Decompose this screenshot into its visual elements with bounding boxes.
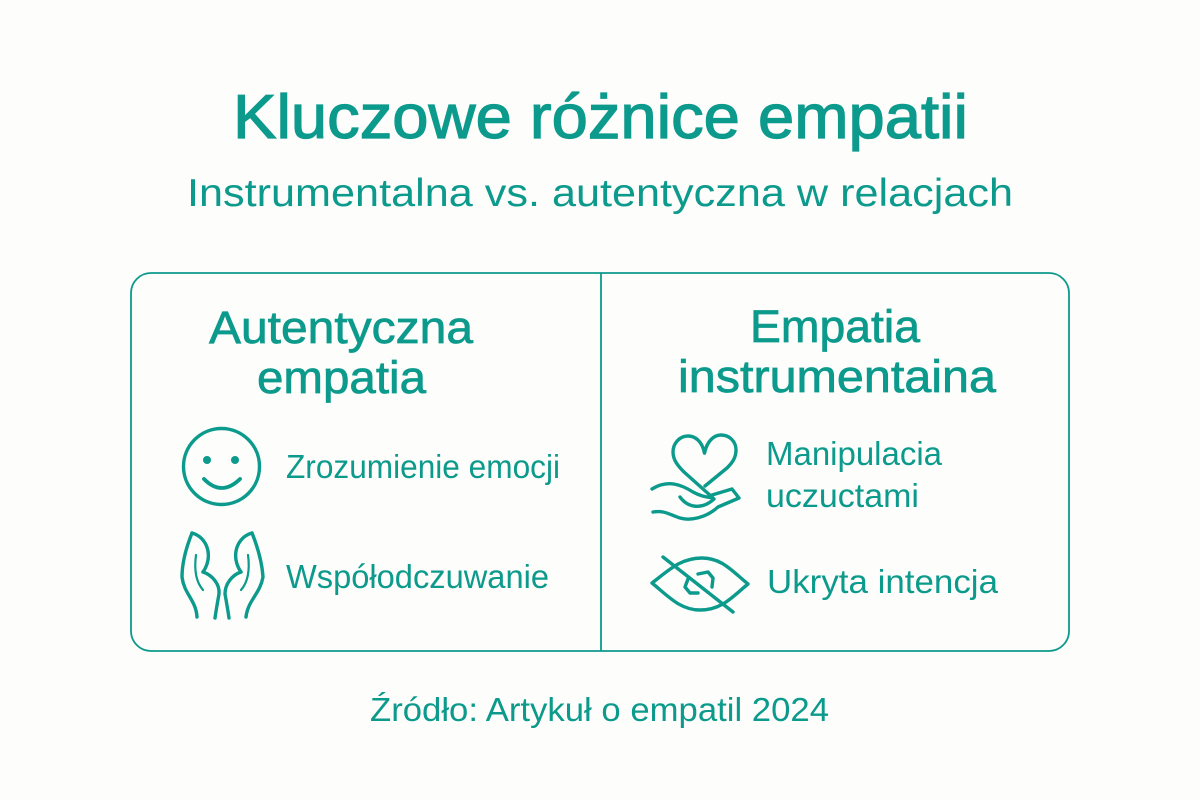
title: Kluczowe różnice empatii <box>233 83 968 152</box>
label: compassion: Współodczuwanie <box>286 558 549 595</box>
panel: instrumental empathy <box>652 301 999 612</box>
label: understanding emotions: Zrozumienie emocji <box>286 448 560 485</box>
heading: instrumental empathy <box>678 301 997 402</box>
source note: Źródło: Artykuł o empatil 2024 <box>370 691 829 728</box>
heading: instrumental empathy: Empatia <box>750 301 921 352</box>
icon: heart on hand <box>652 435 739 519</box>
icon: open hands <box>182 533 263 618</box>
icon: smiling face <box>184 428 260 504</box>
heading: authentic empathy <box>209 302 474 403</box>
label: manipulating feelings: uczuctami <box>766 477 919 514</box>
label: hidden intention: Ukryta intencja <box>767 563 999 600</box>
label: manipulating feelings <box>766 435 943 514</box>
heading: authentic empathy: Autentyczna <box>209 302 474 353</box>
comparison panel <box>131 273 1069 651</box>
label: manipulating feelings: Manipulacia <box>766 435 943 472</box>
icon: crossed-out eye <box>652 557 748 612</box>
subtitle: Instrumentalna vs. autentyczna w relacjach <box>187 172 1013 215</box>
heading: instrumental empathy: instrumentaina <box>678 351 997 402</box>
heading: authentic empathy: empatia <box>257 352 427 403</box>
panel: authentic empathy <box>182 302 560 618</box>
